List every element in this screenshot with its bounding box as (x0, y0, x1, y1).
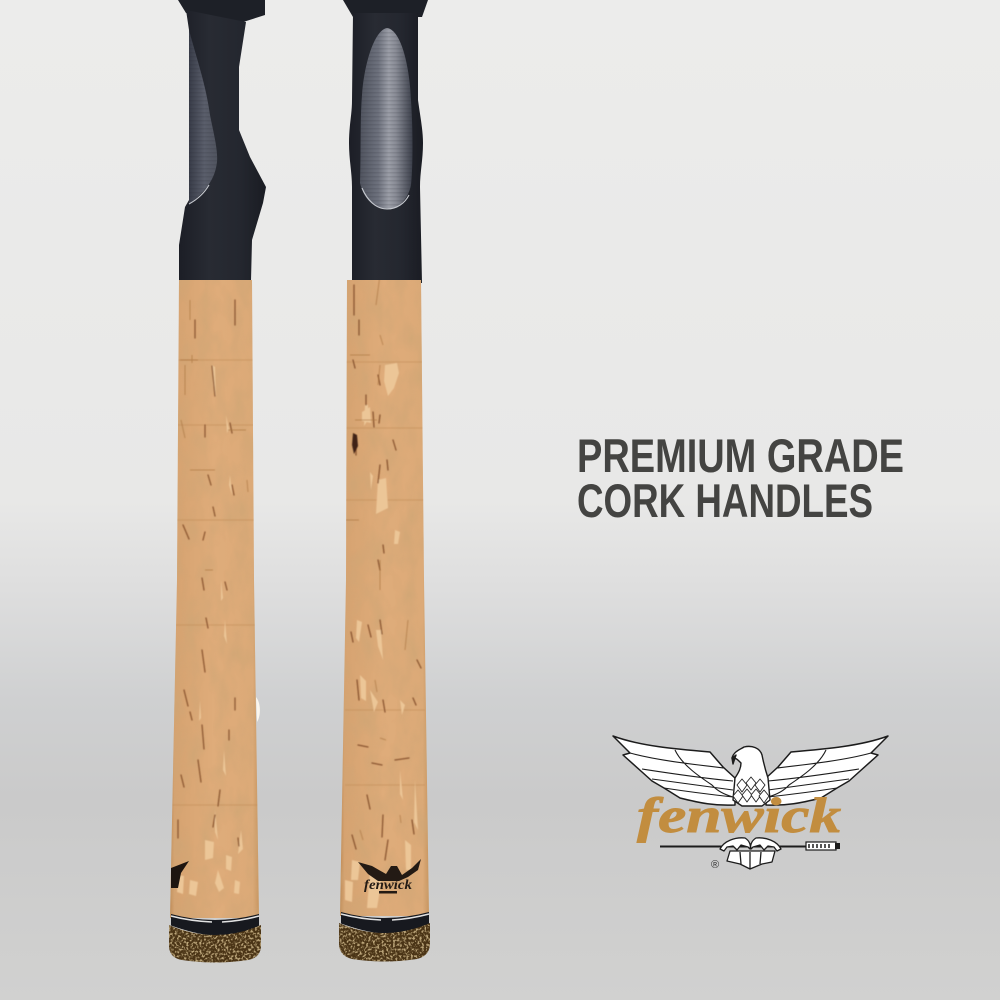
logo fishing rod (660, 842, 840, 850)
mini eagle logo on right cork: fenwick (364, 878, 412, 893)
right cork grip (340, 280, 429, 916)
logo eagle head and body (732, 746, 770, 806)
mini eagle logo on right cork (358, 859, 421, 894)
right rubberized cork butt cap (339, 923, 430, 962)
heading: premium grade cork handles: CORK HANDLES (577, 474, 873, 527)
left rod handle (165, 0, 266, 965)
right winding check bands (340, 912, 430, 935)
logo talons and tail (720, 838, 781, 869)
white speck beside left cork (256, 697, 260, 722)
logo registered mark: ® (711, 859, 719, 871)
left rubberized cork butt cap (169, 925, 261, 962)
right black reel seat grip (343, 0, 428, 283)
heading: premium grade cork handles: PREMIUM GRADE (577, 429, 904, 482)
heading: premium grade cork handles (577, 429, 904, 527)
left gray carbon insert (189, 30, 217, 204)
right gray carbon insert (360, 28, 412, 209)
left winding check bands (170, 914, 260, 937)
logo right wing (766, 736, 888, 805)
logo wordmark fenwick: fenwick (637, 787, 841, 843)
left partial eagle logo on cork (171, 861, 189, 888)
right rod handle (335, 0, 435, 965)
fenwick eagle logo (613, 736, 888, 871)
logo left wing (613, 736, 735, 805)
left cork grip (170, 280, 259, 918)
left black reel seat grip (178, 0, 266, 281)
